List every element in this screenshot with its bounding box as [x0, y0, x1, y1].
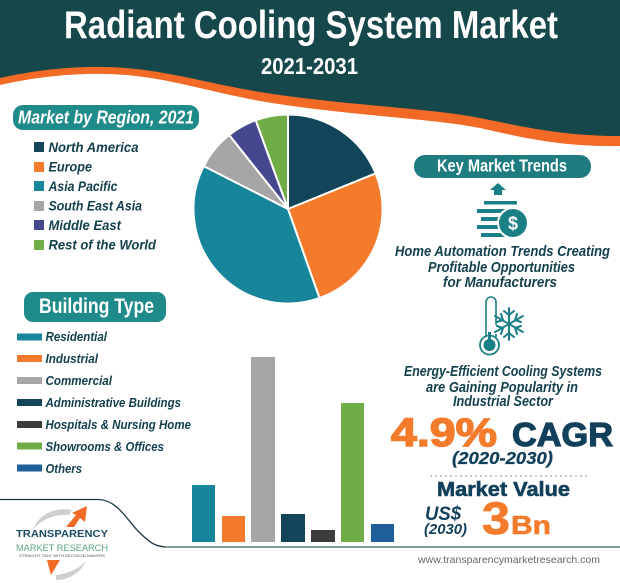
- trend text: energy-efficient cooling: Industrial Sector: [453, 394, 554, 410]
- legend item: Residential: [17, 330, 107, 344]
- stat: market value: Bn: [511, 510, 551, 540]
- stat: market value: 3: [482, 493, 510, 544]
- logo: Transparency Market Research: TRANSPARENCY: [16, 528, 108, 540]
- stat: CAGR: [391, 411, 613, 468]
- heading: key market trends: Key Market Trends: [437, 156, 567, 176]
- legend item: Industrial: [17, 352, 98, 366]
- legend item: Others: Others: [46, 462, 82, 476]
- trend text: home automation: Profitable Opportunities: [428, 259, 575, 276]
- header banner: [0, 0, 620, 146]
- legend item: Middle East: Middle East: [48, 217, 122, 233]
- legend item: Showrooms and Offices: Showrooms & Offices: [46, 440, 164, 454]
- stat: CAGR: 4.9%: [391, 411, 497, 455]
- stat: market value: (2030): [424, 522, 467, 538]
- legend item: Hospitals and Nursing Home: Hospitals & Nursing Home: [46, 418, 191, 432]
- footer curve line: [0, 500, 620, 547]
- icon: thermometer and snowflake: [480, 297, 523, 354]
- heading: market by region: Market by Region, 2021: [18, 106, 194, 128]
- legend item: Asia Pacific: Asia Pacific: [48, 178, 118, 194]
- logo: Transparency Market Research: MARKET RESEARCH: [16, 543, 108, 553]
- bar chart: building type: [192, 357, 394, 542]
- legend item: Commercial: Commercial: [46, 374, 112, 388]
- legend item: Europe: Europe: [48, 158, 92, 174]
- legend item: Others: [17, 462, 82, 476]
- stat: market value: Market Value: [437, 479, 570, 501]
- slice: Rest of the World: [256, 114, 288, 209]
- slice: South East Asia: [204, 135, 288, 209]
- legend item: Rest of the World: Rest of the World: [48, 236, 156, 252]
- slice: Europe: [288, 173, 383, 298]
- heading: building type: [24, 292, 166, 322]
- trend text: home automation: for Manufacturers: [443, 274, 557, 291]
- pie chart: market by region: [193, 114, 383, 304]
- bar: Hospitals and Nursing Home: [311, 530, 335, 542]
- trend text: energy-efficient cooling: [404, 364, 602, 410]
- trend text: energy-efficient cooling: are Gaining Popularity in: [426, 380, 578, 396]
- slice: North America: [288, 114, 376, 209]
- logo: Transparency Market Research: STRAIGHT TALK WITH DECISION MAKERS: [19, 554, 106, 558]
- logo: Transparency Market Research: [16, 506, 108, 580]
- stat: CAGR: (2020-2030): [452, 448, 553, 468]
- bar: Industrial: [222, 516, 245, 542]
- bar: Residential: [192, 485, 215, 542]
- slice: Asia Pacific: [193, 166, 320, 304]
- region legend: [34, 139, 156, 252]
- legend item: South East Asia: South East Asia: [48, 198, 142, 214]
- website url: www.transparencymarketresearch.com: [417, 554, 600, 566]
- building type legend: [17, 330, 191, 476]
- legend item: Administrative Buildings: Administrative Buildings: [45, 396, 181, 410]
- stat: market value: US$: [425, 504, 461, 525]
- stat: CAGR: CAGR: [512, 416, 613, 453]
- stat: market value: [424, 479, 570, 544]
- bar: Showrooms and Offices: [341, 403, 364, 542]
- icon: stacked coins with up arrow: [477, 183, 529, 239]
- subtitle: years: 2021-2031: [261, 53, 358, 79]
- icon: stacked coins with up arrow: $: [508, 214, 518, 234]
- bar: Administrative Buildings: [281, 514, 305, 542]
- legend item: North America: North America: [48, 139, 139, 155]
- bar: Others: [371, 524, 394, 542]
- legend item: Residential: Residential: [46, 330, 107, 344]
- legend item: Industrial: Industrial: [46, 352, 98, 366]
- bar: Commercial: [251, 357, 275, 542]
- heading: building type: Building Type: [39, 295, 154, 318]
- legend item: Commercial: [17, 374, 112, 388]
- slice: Middle East: [229, 120, 288, 209]
- trend text: home automation: [395, 243, 610, 291]
